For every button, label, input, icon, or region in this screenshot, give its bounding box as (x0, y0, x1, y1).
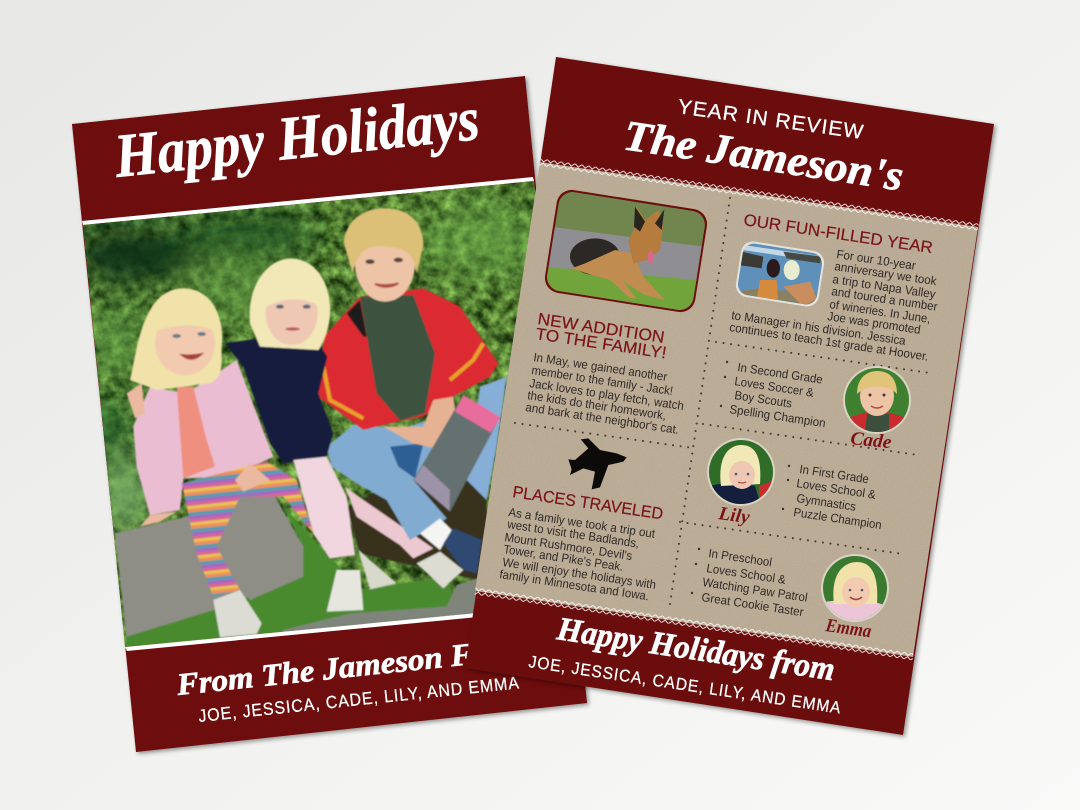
label: emma: Emma (823, 615, 873, 642)
white divider below photo (125, 603, 581, 651)
title: year in review: YEAR IN REVIEW (676, 95, 866, 144)
text: lily bullets: Loves School & (796, 476, 877, 502)
text: new addition body: and bark at the neighbor's cat. (525, 400, 680, 437)
text: places traveled body: We will enjoy the holidays with (502, 555, 657, 592)
text: places traveled body: west to visit the Badlands, (506, 517, 640, 551)
floral pants far leg (345, 487, 433, 558)
card base with shadow (465, 57, 994, 735)
text: places traveled body: Tower, and Pike's Peak. (503, 542, 624, 574)
text: new addition body: member to the family - Jack! (531, 363, 674, 398)
boy jeans (327, 418, 447, 540)
text: new addition body: the kids do their homework, (527, 388, 667, 423)
navy sweater (225, 337, 333, 463)
photo: german shepherd (544, 190, 708, 312)
heading: our fun-filled year: OUR FUN-FILLED YEAR (742, 211, 934, 257)
text: fun-filled year body: and toured a number (831, 284, 938, 314)
footer: from the family: From The Jameson Family (174, 628, 549, 702)
photo: cade (843, 366, 911, 434)
footer: family names: JOE, JESSICA, CADE, LILY, AND EMMA (527, 652, 843, 718)
boy shirt (360, 295, 435, 421)
heading: places traveled: PLACES TRAVELED (511, 483, 664, 523)
family photo (70, 170, 600, 660)
icon: airplane (568, 438, 627, 489)
text: emma bullets: In Preschool (708, 546, 773, 569)
text: places traveled body (499, 505, 657, 603)
photo: wine glasses (736, 242, 824, 306)
text: fun-filled year body: continues to teach 1st grade at Hoover. (729, 320, 929, 364)
text: places traveled body: As a family we took a trip out (508, 505, 657, 541)
stone seat (115, 492, 303, 638)
label: cade: Cade (849, 428, 893, 453)
title: the jameson's: The Jameson's (621, 112, 906, 201)
panel: front card (70, 76, 600, 752)
stone foreground (248, 546, 304, 601)
booklet (413, 395, 500, 512)
heading: new addition: NEW ADDITION (536, 310, 666, 347)
hand on stone (140, 512, 177, 527)
boy head (355, 225, 415, 302)
dark rock behind legs (348, 480, 488, 580)
text: emma bullets: Great Cookie Taster (701, 590, 804, 619)
middle girl floral pants (293, 457, 355, 558)
kraft paper body (475, 162, 978, 657)
text: fun-filled year body (729, 247, 938, 364)
pink cardigan (133, 360, 273, 515)
text: places traveled body: Mount Rushmore, Devil's (504, 530, 633, 563)
text: fun-filled year body: Joe was promoted (827, 309, 922, 337)
boy hand (383, 397, 457, 450)
text: new addition body: In May, we gained another (533, 350, 668, 384)
white divider above photo (82, 177, 534, 225)
ground plants (125, 507, 473, 647)
text: lily bullets: Puzzle Champion (793, 505, 883, 532)
dotted dividers (515, 198, 930, 611)
striped leggings (182, 462, 313, 597)
text: cade bullets: Loves Soccer & (734, 374, 815, 400)
little girl head (130, 288, 222, 390)
heading: new addition (534, 310, 668, 362)
footer: names: JOE, JESSICA, CADE, LILY, AND EMMA (197, 672, 521, 726)
boy jacket (318, 288, 498, 430)
footer: happy holidays from: Happy Holidays from (554, 611, 837, 688)
photo: emma (821, 554, 889, 622)
text: cade bullets: Boy Scouts (734, 388, 793, 411)
text: fun-filled year body: For our 10-year (836, 247, 917, 273)
label: lily: Lily (716, 503, 751, 528)
text: fun-filled year body: anniversary we took (834, 259, 938, 288)
text: emma bullets (691, 546, 808, 619)
arm (127, 383, 145, 418)
text: places traveled body: family in Minnesota and Iowa. (499, 567, 650, 603)
heading: new addition: TO THE FAMILY! (534, 325, 668, 362)
text: new addition body: Jack loves to play fetch, watch (529, 376, 685, 413)
text: fun-filled year body: to Manager in his division. Jessica (731, 308, 907, 348)
middle girl head (250, 258, 330, 350)
lace trims (474, 159, 979, 660)
text: lily bullets: Gymnastics (796, 491, 857, 514)
jeans far leg (467, 377, 507, 500)
text: fun-filled year body: a trip to Napa Valley (832, 272, 937, 301)
text: emma bullets: Watching Paw Patrol (702, 575, 808, 605)
text: cade bullets: Spelling Champion (729, 402, 827, 430)
text: fun-filled year body: of wineries. In June, (829, 297, 932, 326)
text: cade bullets (720, 360, 827, 430)
text: lily bullets: In First Grade (799, 462, 870, 486)
panel: year in review card (460, 57, 994, 735)
white shoes and socks (213, 590, 262, 637)
text: new addition body (525, 350, 685, 437)
heading: happy holidays: Happy Holidays (110, 85, 482, 191)
photo: lily (707, 438, 775, 506)
text: cade bullets: In Second Grade (737, 360, 824, 387)
text: lily bullets (782, 462, 883, 532)
text: emma bullets: Loves School & (706, 561, 787, 587)
